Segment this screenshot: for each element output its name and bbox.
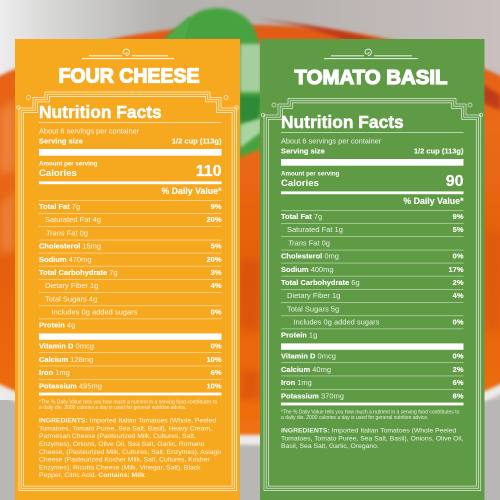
nutrition facts label: 0% xyxy=(453,352,464,361)
nutrition facts label: Calories xyxy=(281,178,319,189)
nutrition facts label: 5% xyxy=(453,225,464,234)
nutrition facts label: Cheese (Pasteurized Kosher Milk, Salt, Cultures, Kosher xyxy=(39,456,210,464)
nutrition facts label: Total Fat 7g xyxy=(39,202,80,211)
nutrition facts label: INGREDIENTS: Imported Italian Tomatoes (Whole, Peeled xyxy=(39,418,216,425)
nutrition facts label: Total Carbohydrate 6g xyxy=(281,278,360,287)
nutrition facts label: INGREDIENTS: Imported Italian Tomatoes (Whole Peeled xyxy=(281,428,456,435)
nutrition facts label: 0% xyxy=(211,342,222,351)
nutrition facts label: Saturated Fat 4g xyxy=(45,215,101,224)
nutrition facts label: 110 xyxy=(196,163,222,180)
nutrition facts label: Enzymes), Onions, Olive Oil, Sea Salt, Garlic, Romano xyxy=(39,441,205,448)
ornament: swirl divider xyxy=(324,49,418,59)
nutrition facts label: Vitamin D 0mcg xyxy=(281,352,336,361)
nutrition facts label: 1/2 cup (113g) xyxy=(172,136,222,146)
heading: tomato basil: TOMATO BASIL xyxy=(294,66,448,89)
nutrition facts label: Serving size xyxy=(39,136,83,146)
nutrition facts label: About 6 servings per container xyxy=(281,136,382,145)
nutrition facts label: 5% xyxy=(211,242,222,251)
nutrition facts label: Amount per serving xyxy=(281,170,340,178)
nutrition facts label: Nutrition Facts xyxy=(281,112,404,132)
nutrition facts label xyxy=(39,102,222,479)
nutrition facts label: Potassium 495mg xyxy=(39,381,102,390)
nutrition facts label: Calories xyxy=(39,168,77,179)
decorative frame xyxy=(261,98,483,490)
nutrition facts label: Sodium 400mg xyxy=(281,265,334,274)
nutrition facts label: Calcium 128mg xyxy=(39,355,93,364)
nutrition facts label: 2% xyxy=(453,365,464,374)
nutrition facts label: 6% xyxy=(211,368,222,377)
nutrition facts label: 1/2 cup (113g) xyxy=(414,146,464,156)
nutrition facts label: Vitamin D 0mcg xyxy=(39,342,94,351)
nutrition facts label: Nutrition Facts xyxy=(39,102,162,122)
nutrition facts label: 0% xyxy=(211,308,222,317)
nutrition facts label: 90 xyxy=(446,173,464,190)
nutrition facts label xyxy=(281,112,464,450)
nutrition facts label: % Daily Value* xyxy=(403,196,464,206)
nutrition facts label: 9% xyxy=(211,202,222,211)
nutrition facts label: 4% xyxy=(211,281,222,290)
nutrition facts label: Dietary Fiber 1g xyxy=(45,281,98,290)
nutrition facts label: Parmesan Cheese (Pasteurized Milk, Cultures, Salt, xyxy=(39,433,196,440)
nutrition facts label: Iron 1mg xyxy=(39,368,70,377)
nutrition facts label: Sodium 470mg xyxy=(39,255,92,264)
nutrition facts label: % Daily Value* xyxy=(161,186,222,196)
nutrition facts label: 17% xyxy=(448,265,464,274)
nutrition facts label: Enzymes), Ricotta Cheese (Milk, Vinegar, Salt), Black xyxy=(39,464,201,471)
nutrition facts label: Cheese, (Pasteurized Milk, Cultures, Salt, Enzymes), Asiago xyxy=(39,449,221,456)
nutrition facts label: 20% xyxy=(206,255,222,264)
nutrition facts label: Serving size xyxy=(281,146,325,156)
nutrition facts label: *The % Daily Value tells you how much a nutrient in a serving food contributes to xyxy=(39,399,218,405)
nutrition facts label: Potassium 370mg xyxy=(281,391,344,400)
decorative frame xyxy=(17,92,238,490)
nutrition facts label: Amount per serving xyxy=(39,160,98,168)
nutrition facts label: About 6 servings per container xyxy=(39,126,140,135)
nutrition facts label: 20% xyxy=(206,215,222,224)
nutrition facts label: Pepper, Citric Acid. Contains: Milk xyxy=(39,472,145,479)
nutrition facts label: Includes 0g added sugars xyxy=(294,318,380,327)
nutrition facts label: 10% xyxy=(206,355,222,364)
nutrition facts label: Calcium 40mg xyxy=(281,365,331,374)
nutrition facts label: Total Sugars 4g xyxy=(45,294,97,303)
heading: four cheese: FOUR CHEESE xyxy=(58,65,200,88)
nutrition facts label: Trans Fat 0g xyxy=(46,228,88,237)
panel: four cheese xyxy=(15,39,240,500)
nutrition facts label: 0% xyxy=(453,252,464,261)
nutrition facts label: Trans Fat 0g xyxy=(288,238,330,247)
nutrition facts label: 8% xyxy=(453,391,464,400)
nutrition facts label: a daily die. 2000 calories a day is used for general nutrition advice. xyxy=(281,415,429,421)
nutrition facts label: Protein 1g xyxy=(281,331,317,340)
nutrition facts label: Total Fat 7g xyxy=(281,212,322,221)
nutrition facts label: 9% xyxy=(453,212,464,221)
nutrition facts label: Dietary Fiber 1g xyxy=(287,291,340,300)
nutrition facts label: Includes 0g added sugars xyxy=(52,308,138,317)
nutrition facts label: Protein 4g xyxy=(39,321,75,330)
nutrition facts label: Tomatoes, Tomato Puree, Sea Salt, Basil), Onions, Olive Oil, xyxy=(281,436,463,442)
nutrition facts label: 4% xyxy=(453,291,464,300)
nutrition facts label: Total Sugars 5g xyxy=(287,304,339,313)
nutrition facts label: 3% xyxy=(211,268,222,277)
nutrition facts label: 6% xyxy=(453,378,464,387)
nutrition facts label: Tomatoes, Tomato Puree, Sea Salt, Basil), Heavy Cream, xyxy=(39,426,212,432)
nutrition facts label: Total Carbohydrate 7g xyxy=(39,268,118,277)
nutrition facts label: 2% xyxy=(453,278,464,287)
nutrition facts label: Cholesterol 0mg xyxy=(281,252,339,261)
nutrition facts label: Iron 1mg xyxy=(281,378,312,387)
nutrition facts label: 0% xyxy=(453,318,464,327)
nutrition facts label: Basil, Sea Salt, Garlic, Oregano. xyxy=(281,443,379,450)
nutrition facts label: 10% xyxy=(206,381,222,390)
nutrition facts label: a daily die. 2000 calories a day is used for general nutrition advice. xyxy=(39,405,187,411)
nutrition facts label: Saturated Fat 1g xyxy=(287,225,343,234)
nutrition facts label: Cholesterol 15mg xyxy=(39,242,101,251)
ornament: swirl divider xyxy=(82,49,174,59)
nutrition facts label: *The % Daily Value tells you how much a nutrient in a serving food contributes to xyxy=(281,409,460,415)
panel: tomato basil xyxy=(260,39,484,500)
